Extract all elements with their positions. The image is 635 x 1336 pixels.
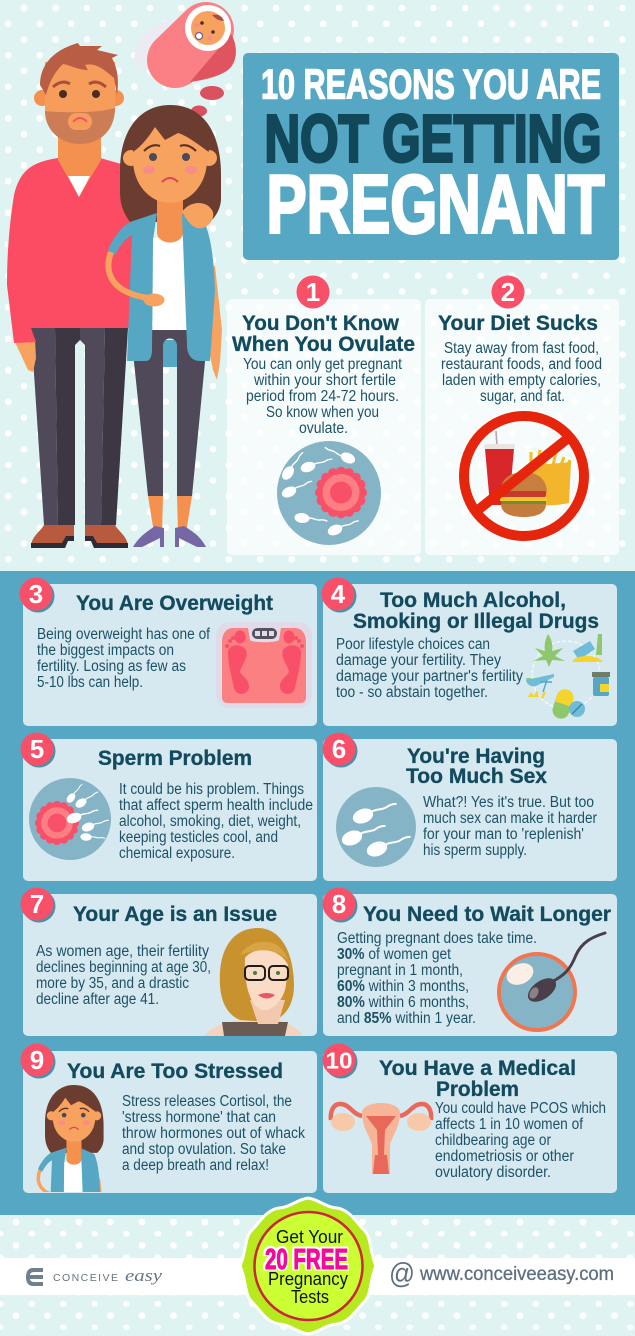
panel: reason 3: You Are Overweight (76, 592, 273, 615)
panel: reason 5: that affect sperm health include (119, 797, 313, 814)
icon: woman with glasses (204, 928, 303, 1036)
panel: reason 8: 60% within 3 months, (337, 978, 469, 995)
panel: reason 8: pregnant in 1 month, (337, 962, 463, 979)
icon: drugs and pills (526, 634, 610, 721)
panel: reason 7: declines beginning at age 30, (36, 959, 211, 976)
panel: reason 3: 3 (29, 579, 43, 609)
panel: reason 2: Stay away from fast food, (444, 340, 599, 357)
panel: reason 6: 6 (332, 734, 346, 764)
panel: reason 2: Your Diet Sucks (438, 312, 598, 335)
panel: reason 1: You Don't Know (242, 312, 400, 335)
panel: reason 1: So know when you (266, 404, 379, 421)
panel: reason 6: Too Much Sex (406, 765, 547, 788)
panel: reason 7 (20, 888, 317, 1036)
panel: reason 10: ovulatory disorder. (435, 1164, 551, 1181)
panel: reason 5: keeping testicles cool, and (119, 829, 278, 846)
panel: reason 3 (20, 578, 317, 726)
panel: reason 2: 2 (501, 277, 515, 307)
panel: reason 6: What?! Yes it's true. But too (423, 794, 594, 811)
panel: reason 9: 'stress hormone' that can (122, 1109, 276, 1126)
panel: reason 10: childbearing age or (435, 1132, 551, 1149)
footer background (0, 1215, 635, 1336)
panel: reason 10: endometriosis or other (435, 1148, 574, 1165)
panel: reason 10: You could have PCOS which (435, 1100, 606, 1117)
panel: reason 4: Smoking or Illegal Drugs (353, 610, 599, 633)
panel: reason 9: Stress releases Cortisol, the (122, 1093, 292, 1110)
panel: reason 8: 30% of women get (337, 946, 452, 963)
panel: reason 4: too - so abstain together. (336, 684, 488, 701)
website address: @ (389, 1258, 415, 1290)
panel: reason 1: 1 (306, 277, 320, 307)
panel: reason 8: You Need to Wait Longer (363, 903, 611, 926)
panel: reason 2 (425, 276, 619, 555)
panel: reason 8: 80% within 6 months, (337, 994, 469, 1011)
panel: reason 6: much sex can make it harder (423, 810, 597, 827)
website address (389, 1258, 614, 1290)
icon: no fast food (464, 416, 584, 536)
logo: Conceive Easy (26, 1266, 163, 1286)
panel: reason 3: the biggest impacts on (37, 642, 174, 659)
callout: free pregnancy tests badge (240, 1198, 376, 1334)
panel: reason 9: throw hormones out of whack (122, 1125, 305, 1142)
panel: reason 8: 8 (332, 889, 346, 919)
panel: reason 9 (20, 1044, 317, 1244)
panel: reason 9: and stop ovulation. So take (122, 1141, 286, 1158)
panel: reason 10: 10 (326, 1048, 352, 1074)
panel: reason 1: period from 24-72 hours. (246, 388, 399, 405)
panel: reason 7: 7 (30, 889, 44, 919)
icon: uterus (331, 1103, 431, 1174)
panel: reason 6: his sperm supply. (423, 842, 527, 859)
panel: reason 10: affects 1 in 10 women of (435, 1116, 584, 1133)
woman (108, 105, 222, 547)
panel: reason 8: and 85% within 1 year. (337, 1010, 476, 1027)
panel: reason 6: You're Having (407, 745, 545, 768)
icon: bathroom scale (216, 622, 312, 708)
panel: reason 9: You Are Too Stressed (67, 1060, 283, 1083)
man's hand on shoulder (182, 203, 213, 228)
icon: thought bubble with baby (125, 5, 236, 116)
panel: reason 7: Your Age is an Issue (73, 903, 277, 926)
callout: free pregnancy tests badge: Get Your (276, 1227, 343, 1247)
callout: free pregnancy tests badge: 20 FREE (265, 1244, 348, 1276)
panel: reason 10: Problem (436, 1078, 519, 1101)
panel: reason 3: fertility. Losing as few as (37, 658, 186, 675)
icon: stressed woman (36, 1085, 104, 1192)
panel: reason 5: 5 (30, 734, 44, 764)
panel: reason 5: Sperm Problem (98, 747, 252, 770)
blue reasons band (0, 571, 635, 1215)
website address: www.conceiveeasy.com (419, 1264, 614, 1285)
panel: reason 5: chemical exposure. (119, 845, 235, 862)
panel: reason 5: alcohol, smoking, diet, weight, (119, 813, 301, 830)
panel: reason 5: It could be his problem. Things (119, 781, 304, 798)
panel: reason 1: You can only get pregnant (243, 356, 403, 373)
callout: free pregnancy tests badge: Tests (291, 1287, 329, 1307)
panel: reason 10 (322, 1044, 617, 1193)
panel: reason 2: laden with empty calories, (442, 372, 601, 389)
panel: reason 7: more by 35, and a drastic (36, 975, 189, 992)
panel: reason 4: Too Much Alcohol, (380, 589, 566, 612)
panel: reason 3: 5-10 lbs can help. (37, 674, 143, 691)
man (7, 43, 135, 548)
icon: sperm reaching egg (29, 778, 111, 860)
panel: reason 4: damage your partner's fertility (336, 668, 523, 685)
panel: reason 4: 4 (331, 579, 346, 609)
panel: reason 1 (227, 276, 421, 555)
icon: egg and sperm (277, 437, 381, 545)
callout: free pregnancy tests badge: Pregnancy (268, 1269, 348, 1289)
icon: three sperm (336, 787, 416, 867)
panel: reason 9: 9 (30, 1045, 44, 1075)
panel: reason 2: restaurant foods, and food (441, 356, 602, 373)
panel: reason 6 (322, 732, 617, 881)
panel: reason 1: within your short fertile (253, 372, 396, 389)
logo: Conceive Easy: CONCEIVE (53, 1272, 118, 1284)
illustration: worried couple (7, 5, 236, 548)
panel: reason 1: ovulate. (299, 420, 348, 437)
panel: reason 5 (20, 732, 317, 881)
panel: reason 9: a deep breath and relax! (122, 1157, 269, 1174)
panel: reason 2: sugar, and fat. (480, 388, 565, 405)
title panel (243, 53, 619, 260)
panel: reason 8: Getting pregnant does take time. (337, 930, 537, 947)
panel: reason 4: Poor lifestyle choices can (336, 636, 490, 653)
panel: reason 8 (322, 888, 617, 1036)
panel: reason 7: As women age, their fertility (36, 943, 209, 960)
panel: reason 6: for your man to 'replenish' (423, 826, 584, 843)
panel: reason 7: decline after age 41. (36, 991, 159, 1008)
panel: reason 4 (322, 578, 617, 726)
panel: reason 3: Being overweight has one of (37, 626, 211, 643)
icon: sperm in circle (499, 933, 605, 1030)
panel: reason 10: You Have a Medical (379, 1057, 576, 1080)
logo: Conceive Easy: easy (125, 1266, 163, 1285)
panel: reason 4: damage your fertility. They (336, 652, 501, 669)
panel: reason 1: When You Ovulate (232, 333, 415, 356)
